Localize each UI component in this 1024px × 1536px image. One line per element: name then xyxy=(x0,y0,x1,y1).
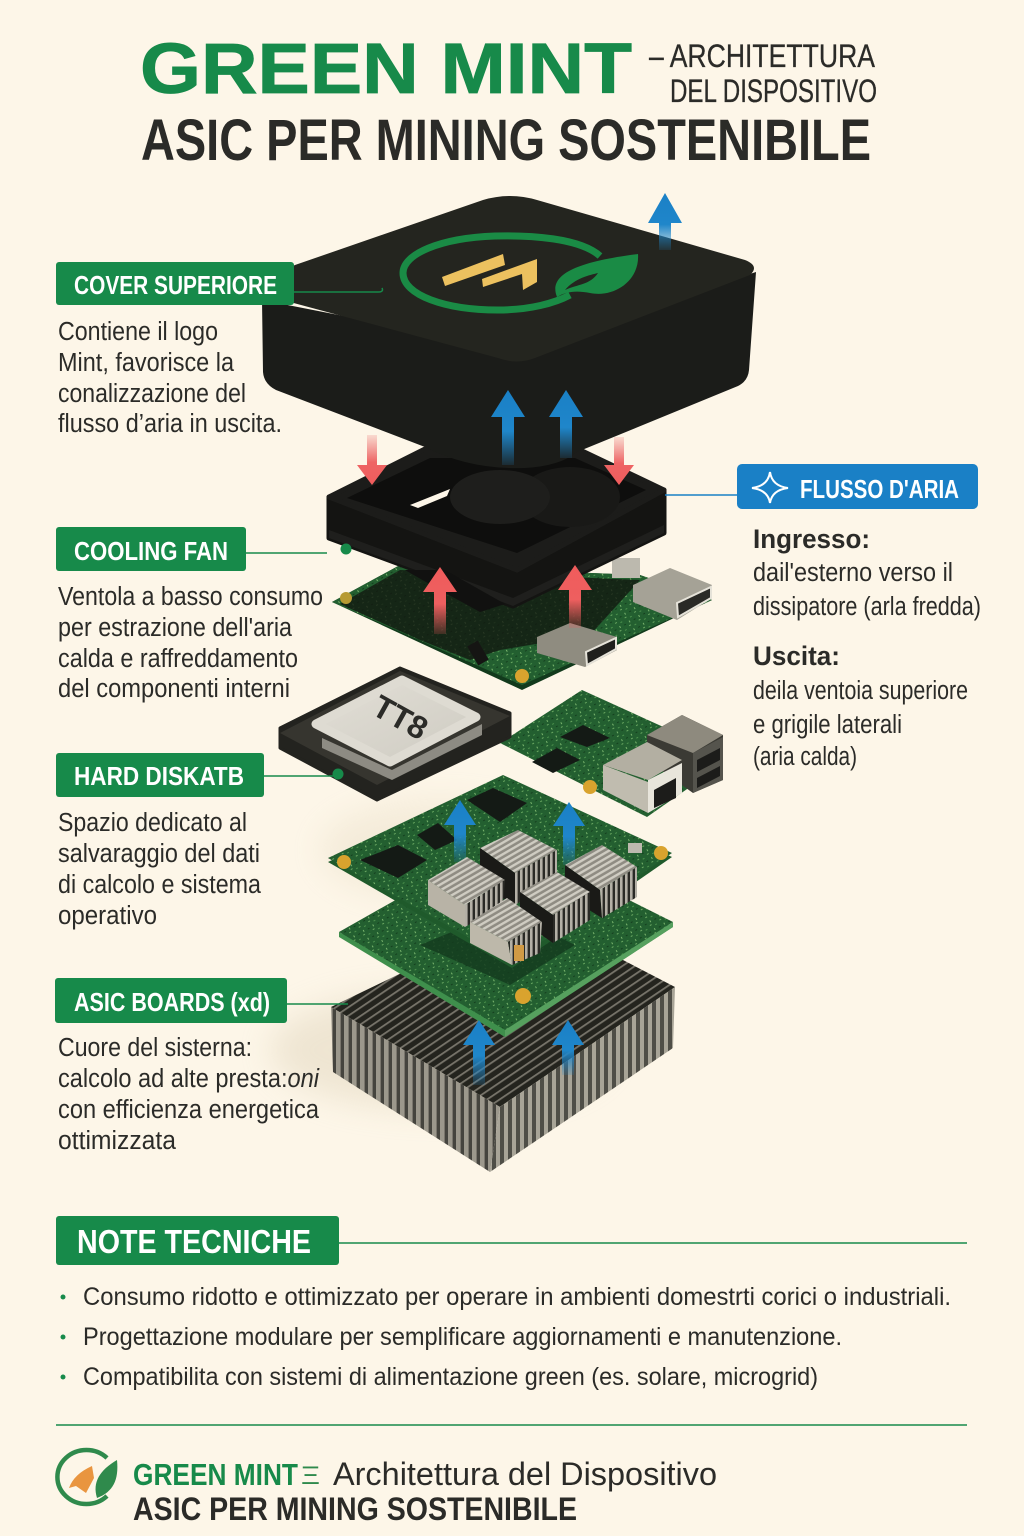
notes list: Progettazione modulare per semplificare aggiornamenti e manutenzione. xyxy=(83,1323,842,1351)
notes list xyxy=(60,1283,951,1391)
title xyxy=(140,30,877,173)
label: hard disk xyxy=(56,753,344,797)
text: hard disk xyxy=(58,809,262,930)
text: asic boards xyxy=(58,1034,320,1155)
pcb board with connectors xyxy=(500,690,723,817)
hard disk xyxy=(280,668,510,800)
arrow: blue exhaust centre left xyxy=(491,390,525,465)
asic board lower xyxy=(339,838,673,1037)
footer text: ASIC PER MINING SOSTENIBILE xyxy=(133,1491,577,1527)
text: asic boards: calcolo ad alte presta:oni xyxy=(58,1065,320,1093)
top cover xyxy=(262,196,756,468)
text: airflow description: (aria calda) xyxy=(753,743,857,771)
notes list: Consumo ridotto e ottimizzato per operare in ambienti domestrti corici o industriali. xyxy=(83,1283,951,1311)
text: cover superiore xyxy=(58,318,282,438)
text: asic boards: Cuore del sisterna: xyxy=(58,1034,252,1062)
heatsink blocks on board xyxy=(428,830,637,965)
text: airflow description: dissipatore (arla fredda) xyxy=(753,593,981,621)
text: hard disk: Spazio dedicato al xyxy=(58,809,247,837)
text: hard disk: salvaraggio del dati xyxy=(58,840,260,868)
title: GREEN MINT xyxy=(140,30,632,109)
text: hard disk: di calcolo e sistema xyxy=(58,871,262,899)
text: asic boards: con efficienza energetica xyxy=(58,1096,320,1124)
footer text xyxy=(133,1456,717,1527)
heading: note tecniche: NOTE TECNICHE xyxy=(77,1223,311,1260)
text: asic boards: ottimizzata xyxy=(58,1127,177,1155)
text: cover superiore: flusso d’aria in uscita. xyxy=(58,410,282,438)
text: cooling fan: per estrazione dell'aria xyxy=(58,614,293,642)
title: DEL DISPOSITIVO xyxy=(670,73,877,109)
text: airflow description xyxy=(753,524,981,771)
label: cover superiore: COVER SUPERIORE xyxy=(74,270,277,300)
title: – ARCHITETTURA xyxy=(649,38,876,74)
text: cover superiore: Mint, favorisce la xyxy=(58,349,235,377)
icon: star xyxy=(752,472,788,503)
text: cooling fan: calda e raffreddamento xyxy=(58,645,298,673)
text: airflow description: Ingresso: xyxy=(753,524,870,554)
label: cover superiore xyxy=(56,262,382,305)
label: asic boards: ASIC BOARDS (xd) xyxy=(74,987,270,1017)
heat sink xyxy=(331,935,675,1172)
text: hard disk: operativo xyxy=(58,902,157,930)
arrow: blue board left xyxy=(444,800,476,862)
icon: footer logo xyxy=(57,1450,117,1504)
text: airflow description: Uscita: xyxy=(753,641,840,671)
arrow: blue heat sink right xyxy=(552,1020,584,1075)
label: flusso d'aria: FLUSSO D'ARIA xyxy=(800,474,959,504)
label: flusso d'aria xyxy=(665,464,978,509)
pcb under fan xyxy=(332,558,712,690)
text: airflow description: dail'esterno verso il xyxy=(753,559,953,587)
arrow: blue exhaust top xyxy=(648,193,682,250)
cooling fan xyxy=(329,449,664,612)
arrow: red up left xyxy=(423,567,457,634)
arrow: blue exhaust centre right xyxy=(549,390,583,458)
icon: mint logo xyxy=(403,236,638,310)
arrow: red intake left xyxy=(357,435,387,485)
arrow: blue board right xyxy=(553,802,585,865)
footer text: GREEN MINT xyxy=(133,1457,298,1492)
text: cooling fan: del componenti interni xyxy=(58,675,290,703)
text: cooling fan xyxy=(58,583,323,703)
text: airflow description: e grigile laterali xyxy=(753,711,902,739)
text: cover superiore: conalizzazione del xyxy=(58,380,246,408)
notes list: Compatibilita con sistemi di alimentazione green (es. solare, microgrid) xyxy=(83,1363,818,1391)
shadow under stack xyxy=(270,800,610,1110)
asic board upper xyxy=(328,775,672,968)
heading: note tecniche xyxy=(56,1216,967,1265)
arrow: red intake right xyxy=(604,437,634,485)
text: airflow description: deila ventoia superiore xyxy=(753,677,968,705)
footer text: Ξ xyxy=(301,1462,320,1490)
arrow: red up right xyxy=(558,565,592,628)
text: cover superiore: Contiene il logo xyxy=(58,318,218,346)
footer text: Architettura del Dispositivo xyxy=(333,1456,717,1492)
text: cooling fan: Ventola a basso consumo xyxy=(58,583,323,611)
label: asic boards xyxy=(55,978,348,1023)
label: cooling fan xyxy=(56,527,352,571)
title: ASIC PER MINING SOSTENIBILE xyxy=(141,108,871,173)
arrow: blue heat sink left xyxy=(463,1020,495,1085)
label: cooling fan: COOLING FAN xyxy=(74,536,228,566)
label: hard disk: HARD DISKATB xyxy=(74,761,244,791)
hard disk: TT8 xyxy=(367,688,434,747)
